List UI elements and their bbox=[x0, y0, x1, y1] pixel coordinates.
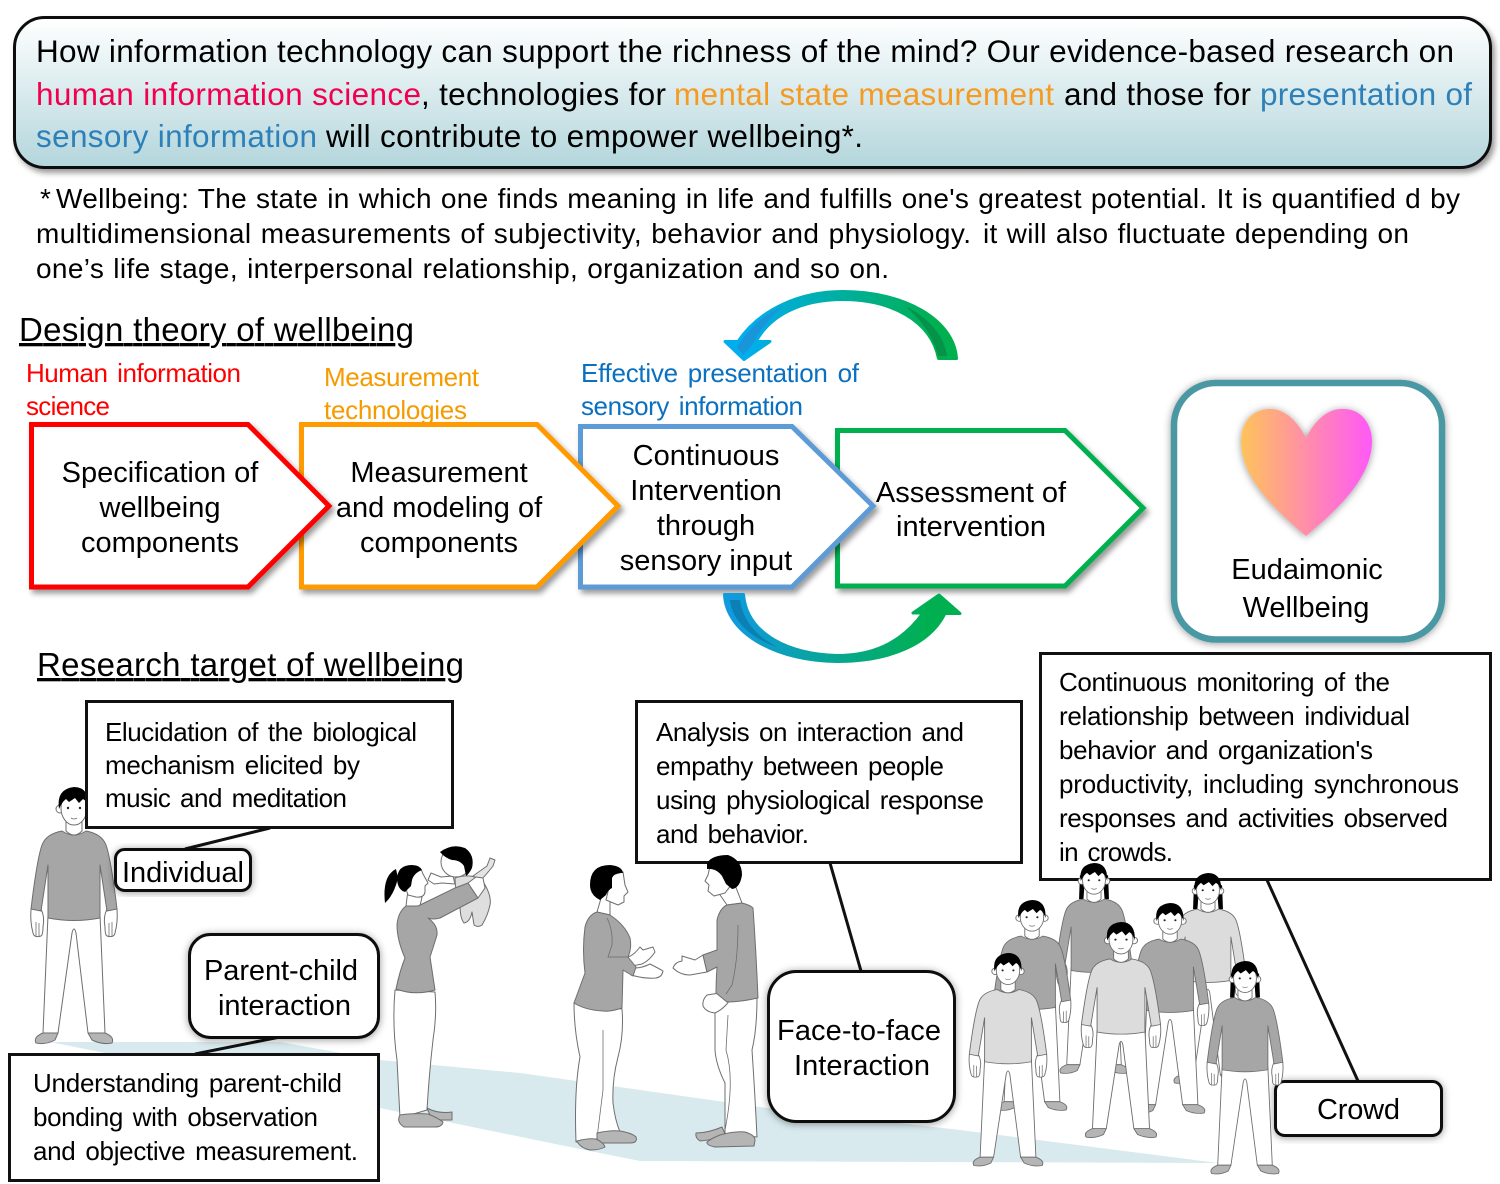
figure: man facing left bbox=[673, 855, 758, 1147]
heading: research target: Research target of wellbeing bbox=[37, 646, 464, 683]
header banner: sensory information bbox=[36, 118, 317, 154]
wellbeing definition footnote: multidimensional measurements of subjectivity, behavior and physiology. bbox=[36, 218, 971, 249]
chevron: assessment of intervention: intervention bbox=[896, 511, 1046, 543]
callout: individual biology: Elucidation of the biological bbox=[105, 717, 417, 747]
callout: parent-child bonding: Understanding parent-child bbox=[33, 1068, 342, 1098]
connector: face-to-face bbox=[830, 863, 861, 971]
callout: interaction analysis bbox=[636, 702, 1022, 862]
wellbeing definition footnote bbox=[36, 183, 1460, 284]
figure: woman facing right bbox=[574, 865, 663, 1150]
chevron: measurement and modeling: and modeling of bbox=[336, 492, 543, 524]
chevron: continuous intervention: through bbox=[657, 510, 755, 542]
callout: parent-child bonding: bonding with observation bbox=[33, 1102, 318, 1132]
header banner: will contribute to empower wellbeing*. bbox=[325, 118, 863, 154]
label: human information science: science bbox=[26, 391, 110, 421]
label: measurement technologies bbox=[324, 362, 480, 425]
chevron: specification of components: Specification of bbox=[62, 457, 259, 489]
callout: crowd monitoring: Continuous monitoring of the bbox=[1059, 667, 1390, 697]
label: face-to-face interaction: Face-to-face bbox=[777, 1015, 941, 1047]
chevron: specification of components: components bbox=[81, 527, 239, 559]
callout: individual biology: mechanism elicited by bbox=[105, 750, 360, 780]
label: parent-child interaction: Parent-child bbox=[204, 955, 358, 987]
header banner bbox=[14, 18, 1490, 168]
header banner: How information technology can support the richness of the mind? Our evidence-based research on bbox=[36, 33, 1454, 69]
eudaimonic wellbeing panel bbox=[1174, 383, 1442, 640]
arrow: feedback top bbox=[725, 292, 956, 360]
chevron: continuous intervention: Intervention bbox=[630, 475, 782, 507]
wellbeing definition footnote: Wellbeing: The state in which one finds meaning in life and fulfills one's greatest potential. It is quantified d by bbox=[56, 183, 1460, 214]
chevron: continuous intervention: sensory input bbox=[620, 545, 792, 577]
label: crowd: Crowd bbox=[1317, 1094, 1400, 1126]
wellbeing definition footnote: it will also fluctuate depending on bbox=[983, 218, 1409, 249]
figure: mother and baby bbox=[384, 846, 495, 1127]
connector: individual bbox=[185, 828, 270, 849]
icon: heart bbox=[1241, 409, 1372, 536]
header banner: and those for bbox=[1064, 76, 1251, 112]
chevron: measurement and modeling: Measurement bbox=[350, 457, 528, 489]
callout: interaction analysis: using physiological response bbox=[656, 785, 984, 815]
label: measurement technologies: Measurement bbox=[324, 362, 480, 392]
label: face-to-face interaction: Interaction bbox=[794, 1050, 930, 1082]
wellbeing definition footnote: one’s life stage, interpersonal relationship, organization and so on. bbox=[36, 253, 889, 284]
chevron: continuous intervention: Continuous bbox=[633, 440, 779, 472]
callout: individual biology bbox=[86, 702, 452, 828]
chevron: assessment of intervention bbox=[838, 430, 1143, 586]
wellbeing definition footnote: * bbox=[40, 183, 51, 214]
label: face-to-face interaction bbox=[768, 972, 954, 1122]
label: effective presentation bbox=[581, 358, 860, 421]
label: parent-child interaction bbox=[190, 934, 378, 1038]
label: crowd bbox=[1276, 1082, 1442, 1136]
figures: crowd bbox=[969, 863, 1283, 1174]
callout: interaction analysis: and behavior. bbox=[656, 819, 809, 849]
label: human information science: Human information bbox=[26, 358, 241, 388]
chevron: assessment of intervention: Assessment of bbox=[876, 477, 1067, 509]
label: human information science bbox=[26, 358, 241, 421]
label: parent-child interaction: interaction bbox=[218, 990, 351, 1022]
header banner: mental state measurement bbox=[674, 76, 1054, 112]
chevron: measurement and modeling bbox=[302, 424, 618, 587]
chevron: measurement and modeling: components bbox=[360, 527, 518, 559]
callout: parent-child bonding: and objective measurement. bbox=[33, 1136, 358, 1166]
eudaimonic wellbeing panel: Eudaimonic bbox=[1231, 554, 1383, 586]
callout: interaction analysis: Analysis on interaction and bbox=[656, 717, 964, 747]
label: effective presentation: sensory information bbox=[581, 391, 803, 421]
header banner: presentation of bbox=[1260, 76, 1472, 112]
label: individual: Individual bbox=[122, 857, 244, 889]
label: effective presentation: Effective presentation of bbox=[581, 358, 860, 388]
callout: individual biology: music and meditation bbox=[105, 783, 347, 813]
callout: crowd monitoring: productivity, including synchronous bbox=[1059, 769, 1459, 799]
callout: interaction analysis: empathy between people bbox=[656, 751, 944, 781]
callout: crowd monitoring: in crowds. bbox=[1059, 837, 1173, 867]
callout: crowd monitoring bbox=[1040, 654, 1490, 880]
heading: design theory: Design theory of wellbeing bbox=[19, 311, 414, 348]
header banner: human information science bbox=[36, 76, 421, 112]
chevron: continuous intervention bbox=[580, 426, 873, 587]
figure: individual bbox=[31, 787, 117, 1044]
connector: crowd bbox=[1267, 880, 1358, 1081]
eudaimonic wellbeing panel: Wellbeing bbox=[1243, 592, 1369, 624]
label: measurement technologies: technologies bbox=[324, 395, 467, 425]
chevron: specification of components bbox=[32, 424, 329, 587]
callout: crowd monitoring: behavior and organization's bbox=[1059, 735, 1373, 765]
arrow: feedback bottom bbox=[724, 594, 960, 662]
connector: parent-child bbox=[195, 1037, 280, 1054]
chevron: specification of components: wellbeing bbox=[99, 492, 220, 524]
callout: parent-child bonding bbox=[10, 1054, 378, 1180]
floor band bbox=[50, 1042, 1218, 1163]
callout: crowd monitoring: relationship between individual bbox=[1059, 701, 1410, 731]
header banner: , technologies for bbox=[421, 76, 666, 112]
callout: crowd monitoring: responses and activities observed bbox=[1059, 803, 1448, 833]
